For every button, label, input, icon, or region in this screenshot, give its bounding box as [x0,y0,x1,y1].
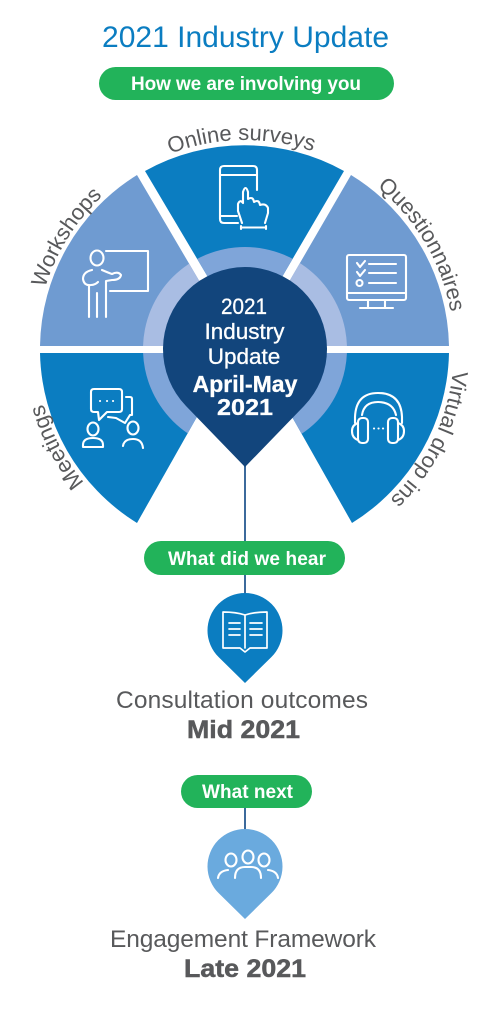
label: virtual drop ins: Virtual drop ins [392,372,468,506]
panel: online surveys [145,128,344,276]
main pin: 2021 Industry Update April-May 2021: 2021 [221,294,267,319]
main pin: 2021 Industry Update April-May 2021: April-May [193,371,298,397]
main pin: 2021 Industry Update April-May 2021: Industry [204,319,285,344]
label: meetings: Meetings [33,406,83,490]
pill: What next [181,775,312,808]
main pin: 2021 Industry Update April-May 2021: Update [208,344,280,369]
panel: meetings [33,353,197,523]
pill: How we are involving you: How we are involving you [131,74,361,95]
label: online surveys: Online surveys [168,128,315,152]
pill: What did we hear [144,541,345,575]
label: workshops: Workshops [30,190,100,284]
text: engagement framework: Engagement Framework [110,926,377,953]
wheel diagram [30,128,468,523]
text: Late 2021: Late 2021 [184,955,306,983]
pill: What did we hear: What did we hear [168,549,327,570]
icon: monitor checklist [347,255,406,308]
main pin: 2021 Industry Update April-May 2021 [163,267,327,467]
panel: virtual drop ins [292,353,468,523]
icon: open book [223,612,267,652]
main pin: 2021 Industry Update April-May 2021: 2021 [217,394,273,420]
panel: workshops [30,175,200,346]
text: consultation outcomes: Consultation outcomes [116,687,368,714]
icon: tablet with pointing hand [220,166,268,229]
icon: presenter at board [83,250,148,317]
label: questionnaires: Questionnaires [380,178,462,311]
pin: engagement framework [208,829,282,919]
panel: questionnaires [290,175,462,346]
pill: How we are involving you [99,67,394,100]
icon: two people talking [83,389,143,448]
pill: What next: What next [202,782,294,803]
title: 2021 Industry Update [102,21,389,54]
connector line from main pin to consultation pin [244,460,246,600]
connector line from what next to engagement pin [244,800,246,835]
icon: headphones [352,393,404,443]
pin: consultation outcomes [208,593,282,683]
icon: group of people [218,850,278,878]
text: Mid 2021: Mid 2021 [187,716,300,744]
